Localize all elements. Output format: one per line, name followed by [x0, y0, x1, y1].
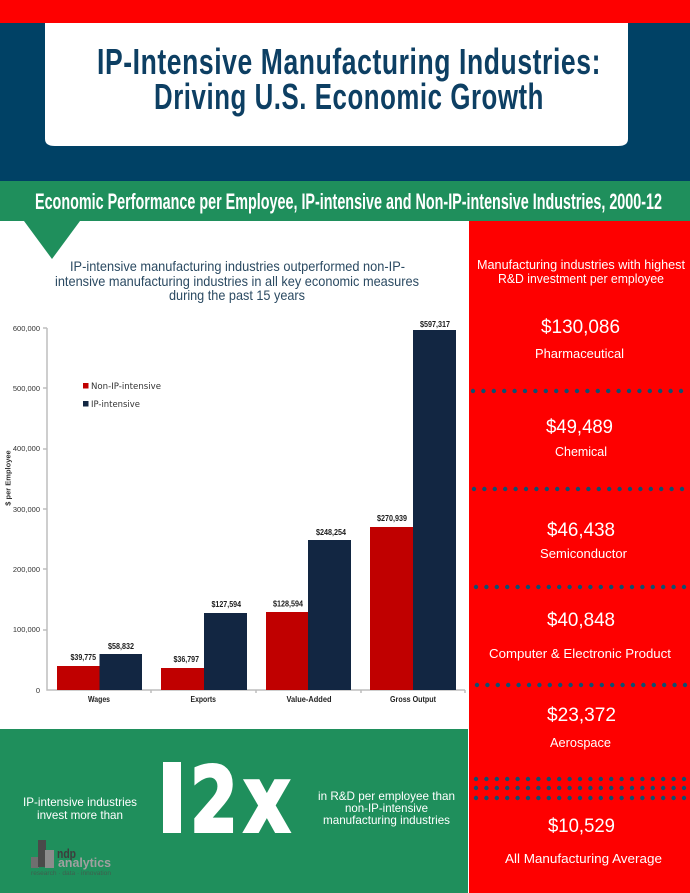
y axis labels: 100,000 — [13, 625, 40, 634]
data labels: $39,775 — [70, 652, 96, 662]
item: All Manufacturing Average: All Manufacturing Average — [505, 851, 662, 866]
data labels: $270,939 — [377, 513, 407, 523]
logo: ndp analytics: research · data · innovation — [31, 871, 111, 877]
data labels: $36,797 — [174, 654, 199, 664]
item: Aerospace — [547, 705, 616, 750]
section banner — [0, 181, 690, 221]
item: Semiconductor: $46,438 — [547, 520, 615, 541]
panel: 12x callout — [0, 729, 468, 893]
category labels: Exports — [190, 694, 216, 704]
item: Computer and Electronic Product: $40,848 — [547, 610, 615, 631]
item: Semiconductor — [540, 520, 628, 561]
data labels — [70, 319, 450, 664]
item: Computer and Electronic Product: Computer & Electronic Product — [489, 646, 671, 661]
y axis labels: 0 — [36, 686, 40, 695]
chart intro text: during the past 15 years — [169, 287, 305, 303]
axes — [43, 328, 465, 693]
item: Chemical — [546, 417, 613, 459]
header band — [0, 23, 690, 181]
item: Aerospace: $23,372 — [547, 705, 616, 726]
data labels: $127,594 — [212, 599, 241, 609]
y axis labels: 400,000 — [13, 444, 40, 453]
non-IP-intensive bars — [57, 527, 413, 690]
item: Chemical: $49,489 — [546, 417, 613, 438]
legend — [83, 382, 161, 410]
callout right text — [318, 789, 455, 827]
category labels: Gross Output — [390, 694, 436, 704]
item: Chemical: Chemical — [555, 444, 607, 459]
title — [97, 41, 601, 117]
callout number — [161, 746, 290, 854]
item: Pharmaceutical: $130,086 — [541, 317, 620, 338]
callout right text: non-IP-intensive — [345, 801, 428, 815]
y axis labels: 300,000 — [13, 505, 40, 514]
item: Pharmaceutical — [535, 317, 624, 361]
panel: R&D investment — [469, 221, 690, 893]
item: All Manufacturing Average — [505, 816, 662, 866]
item: Computer and Electronic Product — [489, 610, 671, 661]
callout number: 1 — [161, 749, 179, 853]
top red strip — [0, 0, 690, 23]
banner pointer — [24, 221, 80, 259]
chart intro text: intensive manufacturing industries in all key economic measures — [55, 273, 419, 289]
legend: IP-intensive — [91, 400, 140, 410]
callout left text: IP-intensive industries — [23, 795, 137, 809]
category labels — [88, 694, 436, 704]
y axis labels: 200,000 — [13, 565, 40, 574]
callout number: x — [244, 746, 290, 854]
item: All Manufacturing Average: $10,529 — [548, 816, 615, 837]
item: Semiconductor: Semiconductor — [540, 546, 628, 561]
IP-intensive bars — [100, 330, 456, 690]
logo: ndp analytics: analytics — [58, 855, 111, 870]
y axis labels: 600,000 — [13, 324, 40, 333]
legend: Non-IP-intensive — [91, 382, 161, 392]
y axis title: $ per Employee — [4, 450, 12, 506]
data labels: $248,254 — [316, 527, 346, 537]
data labels: $597,317 — [420, 319, 450, 329]
item: Aerospace: Aerospace — [550, 735, 611, 750]
y axis labels — [13, 324, 40, 695]
y axis labels: 500,000 — [13, 384, 40, 393]
category labels: Value-Added — [286, 694, 332, 704]
title: Driving U.S. Economic Growth — [154, 76, 544, 117]
callout number: 2 — [190, 748, 238, 853]
item: Pharmaceutical: Pharmaceutical — [535, 346, 624, 361]
callout right text: in R&D per employee than — [318, 789, 455, 803]
callout left text — [23, 795, 137, 822]
logo: ndp analytics — [31, 840, 111, 877]
data labels: $128,594 — [273, 598, 303, 608]
bar chart — [4, 319, 465, 704]
logo: ndp analytics: ndp — [57, 846, 76, 861]
callout left text: invest more than — [37, 808, 123, 822]
title card — [45, 23, 628, 146]
data labels: $58,832 — [108, 641, 134, 651]
callout right text: manufacturing industries — [323, 813, 450, 827]
panel heading: R&D investment per employee — [498, 271, 664, 286]
chart intro text: IP-intensive manufacturing industries outperformed non-IP- — [70, 258, 405, 274]
category labels: Wages — [88, 694, 110, 704]
panel heading: Manufacturing industries with highest — [477, 257, 685, 272]
panel heading — [477, 257, 685, 286]
chart intro text — [55, 258, 419, 303]
